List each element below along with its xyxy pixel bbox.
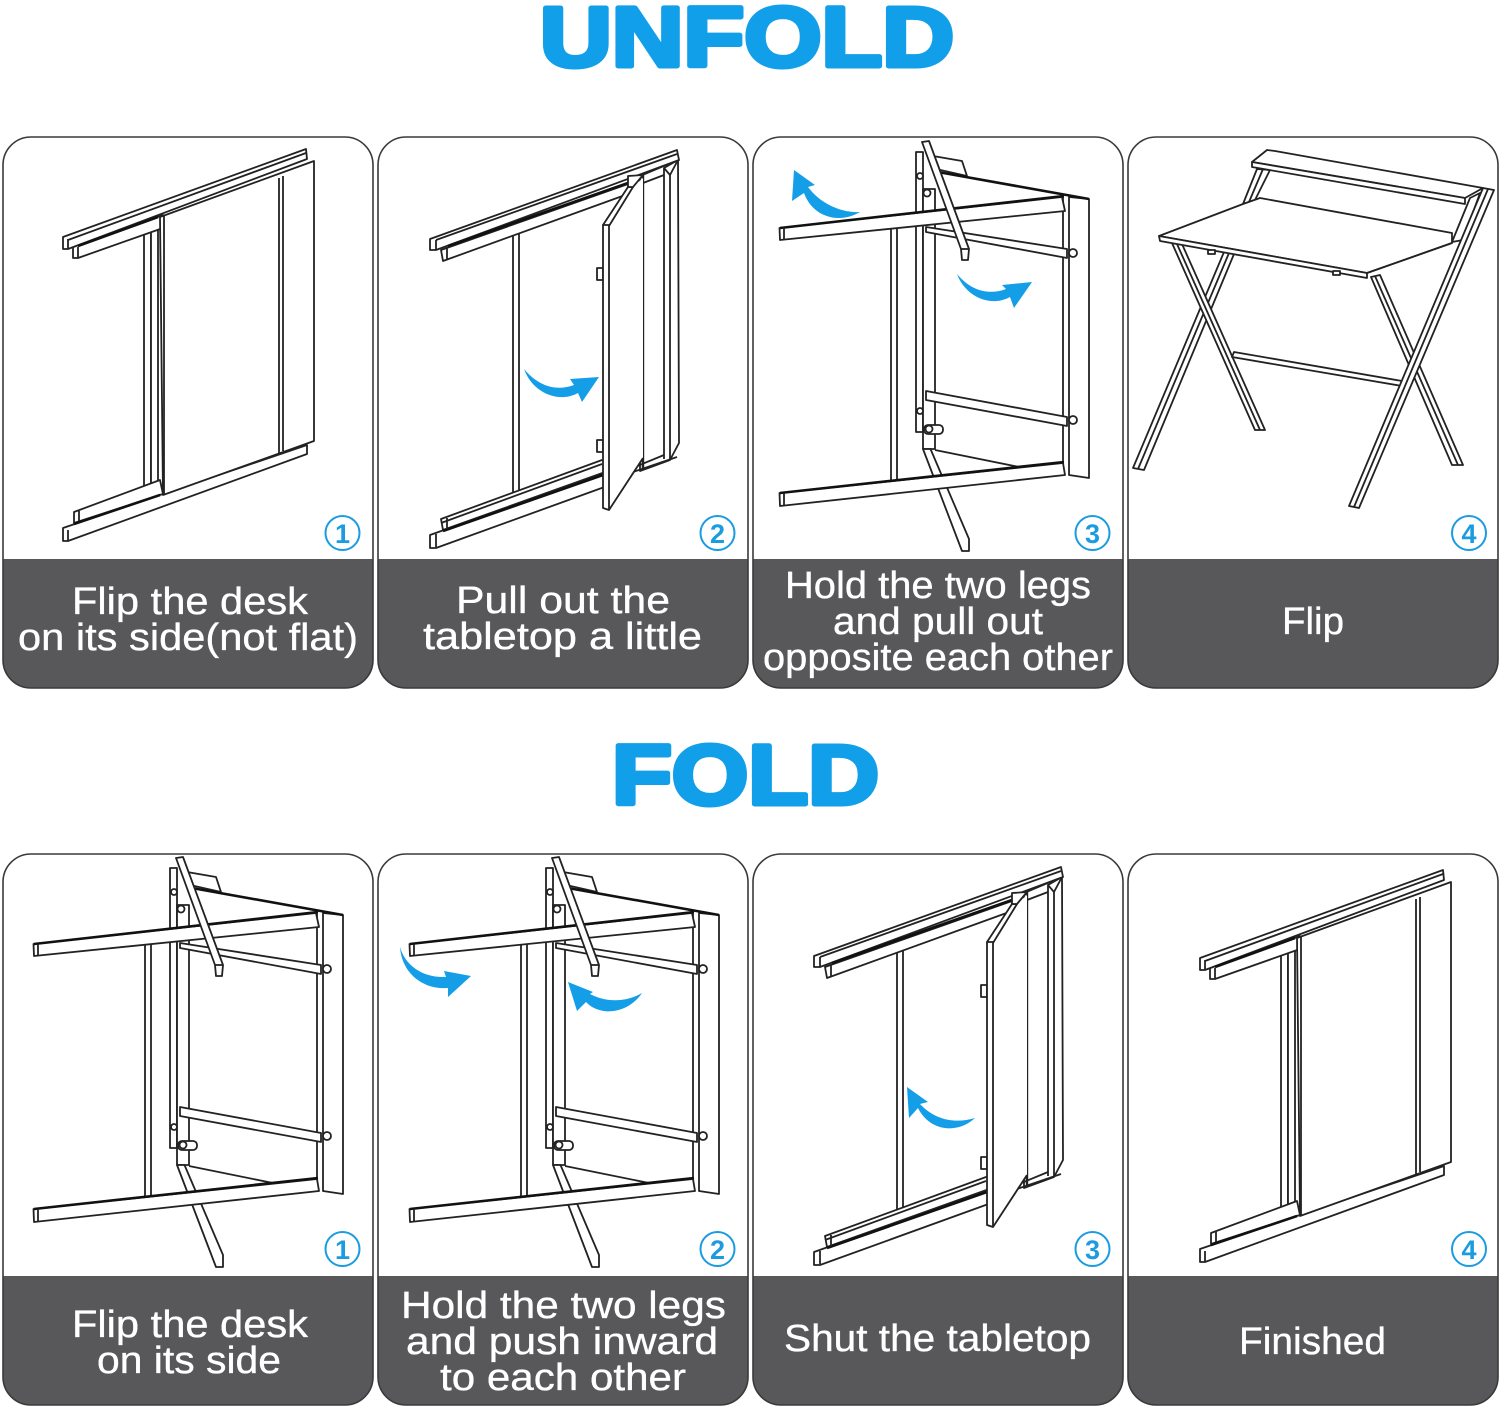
badge: number 4 <box>1452 1232 1486 1266</box>
arrow: upper leg pushed right <box>400 947 471 997</box>
illustration: tabletop pulled out a little <box>430 150 679 548</box>
badge: number 4: 4 <box>1461 1235 1477 1265</box>
caption: pull out the tabletop: tabletop a little <box>423 616 702 658</box>
illustration: fully folded desk <box>1200 870 1451 1262</box>
badge: number 3 <box>1076 516 1110 550</box>
badge: number 3: 3 <box>1085 1235 1100 1265</box>
caption: hold the two legs and pull out <box>763 565 1113 679</box>
caption: flip the desk on its side: on its side(not flat) <box>18 617 358 659</box>
illustration: tabletop being shut <box>814 867 1063 1265</box>
badge: number 2: 2 <box>710 519 725 549</box>
badge: number 4 <box>1452 516 1486 550</box>
caption: flip the desk on its side <box>72 1304 309 1382</box>
panel: unfold step 4 <box>1128 137 1498 688</box>
badge: number 4: 4 <box>1461 519 1477 549</box>
badge: number 2 <box>700 1232 734 1266</box>
panel: fold step 4 <box>1128 854 1498 1405</box>
badge: number 3 <box>1076 1232 1110 1266</box>
illustration: open desk on its side <box>34 857 343 1267</box>
panel: unfold step 3 <box>753 137 1123 688</box>
badge: number 1: 1 <box>335 519 350 549</box>
badge: number 1: 1 <box>335 1235 350 1265</box>
caption: flip the desk on its side: on its side <box>97 1340 281 1382</box>
caption: finished: Finished <box>1239 1321 1386 1363</box>
title: FOLD: FOLD <box>612 728 879 822</box>
arrow: lower leg pulled right <box>957 274 1032 308</box>
badge: number 3: 3 <box>1085 519 1100 549</box>
illustration: unfolded standing desk <box>1133 150 1494 508</box>
badge: number 2: 2 <box>710 1235 725 1265</box>
illustration: legs being pulled apart <box>780 141 1089 551</box>
caption: hold the two legs and push inward: to each other <box>440 1357 686 1399</box>
caption: pull out the tabletop <box>423 580 702 658</box>
panel: unfold step 1 <box>3 137 373 688</box>
caption: shut the tabletop: Shut the tabletop <box>784 1318 1091 1360</box>
panel: unfold step 2 <box>378 137 748 688</box>
caption: hold the two legs and push inward <box>401 1285 726 1399</box>
panel: fold step 3 <box>753 854 1123 1405</box>
arrow: lower leg pushed left <box>568 982 642 1011</box>
caption: flip the desk on its side <box>18 581 358 659</box>
arrow: tabletop closing <box>907 1087 975 1128</box>
caption: hold the two legs and pull out: opposite each other <box>763 637 1113 679</box>
caption: hold the two legs and pull out: and pull out <box>833 601 1043 643</box>
caption: flip: Flip <box>1282 601 1344 643</box>
caption: pull out the tabletop: Pull out the <box>456 580 670 622</box>
badge: number 1 <box>326 516 360 550</box>
caption: hold the two legs and push inward: Hold the two legs <box>401 1285 726 1327</box>
badge: number 1 <box>326 1232 360 1266</box>
badge: number 2 <box>700 516 734 550</box>
caption: flip the desk on its side: Flip the desk <box>72 1304 309 1346</box>
illustration: folded desk on its side <box>63 149 314 541</box>
illustration: legs being pushed inward <box>410 857 719 1267</box>
caption: flip the desk on its side: Flip the desk <box>72 581 309 623</box>
panel: fold step 2 <box>378 854 748 1405</box>
panel: fold step 1 <box>3 854 373 1405</box>
arrow: tabletop opening <box>524 369 599 402</box>
caption: hold the two legs and push inward: and push inward <box>406 1321 718 1363</box>
caption: hold the two legs and pull out: Hold the two legs <box>785 565 1091 607</box>
arrow: upper leg pulled up and left <box>792 170 860 218</box>
